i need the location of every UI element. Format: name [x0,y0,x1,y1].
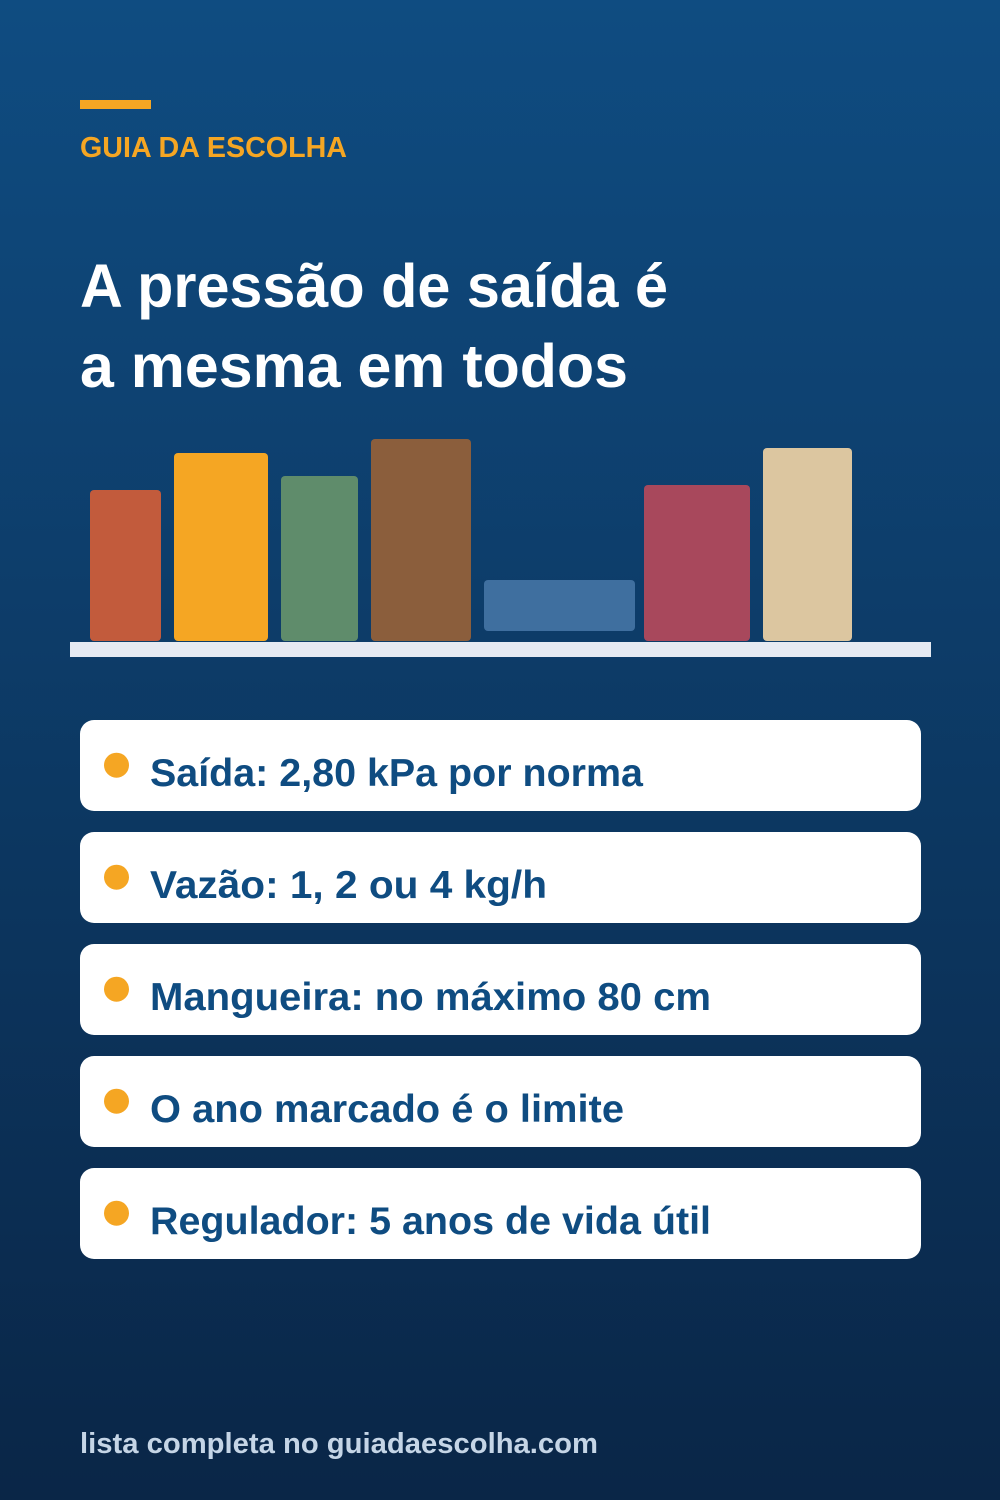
list item: mangueira: Mangueira: no máximo 80 cm [150,976,711,1019]
cylinder: beige [763,448,852,641]
cylinder: brown [371,439,471,641]
list item: ano limite [80,1056,921,1147]
list item: vazão [80,832,921,923]
list item: vazão: Vazão: 1, 2 ou 4 kg/h [150,864,547,907]
cylinder: green [281,476,358,641]
title: a mesma em todos [80,332,628,400]
eyebrow heading: GUIA DA ESCOLHA [80,132,347,164]
list item: mangueira [80,944,921,1035]
cylinder: orange [174,453,268,641]
list item: saída [80,720,921,811]
cylinder: blue horizontal [484,580,635,631]
cylinder: terracotta [90,490,161,641]
accent bar [80,100,151,109]
title [80,252,668,400]
list item: regulador: Regulador: 5 anos de vida útil [150,1200,711,1243]
list item: saída: Saída: 2,80 kPa por norma [150,752,643,795]
shelf [70,642,931,657]
list item: regulador [80,1168,921,1259]
list item: ano limite: O ano marcado é o limite [150,1088,624,1131]
title: A pressão de saída é [80,252,668,320]
cylinder: crimson [644,485,750,641]
shelf with cylinders chart [70,439,931,657]
footer: lista completa no guiadaescolha.com [80,1428,598,1460]
